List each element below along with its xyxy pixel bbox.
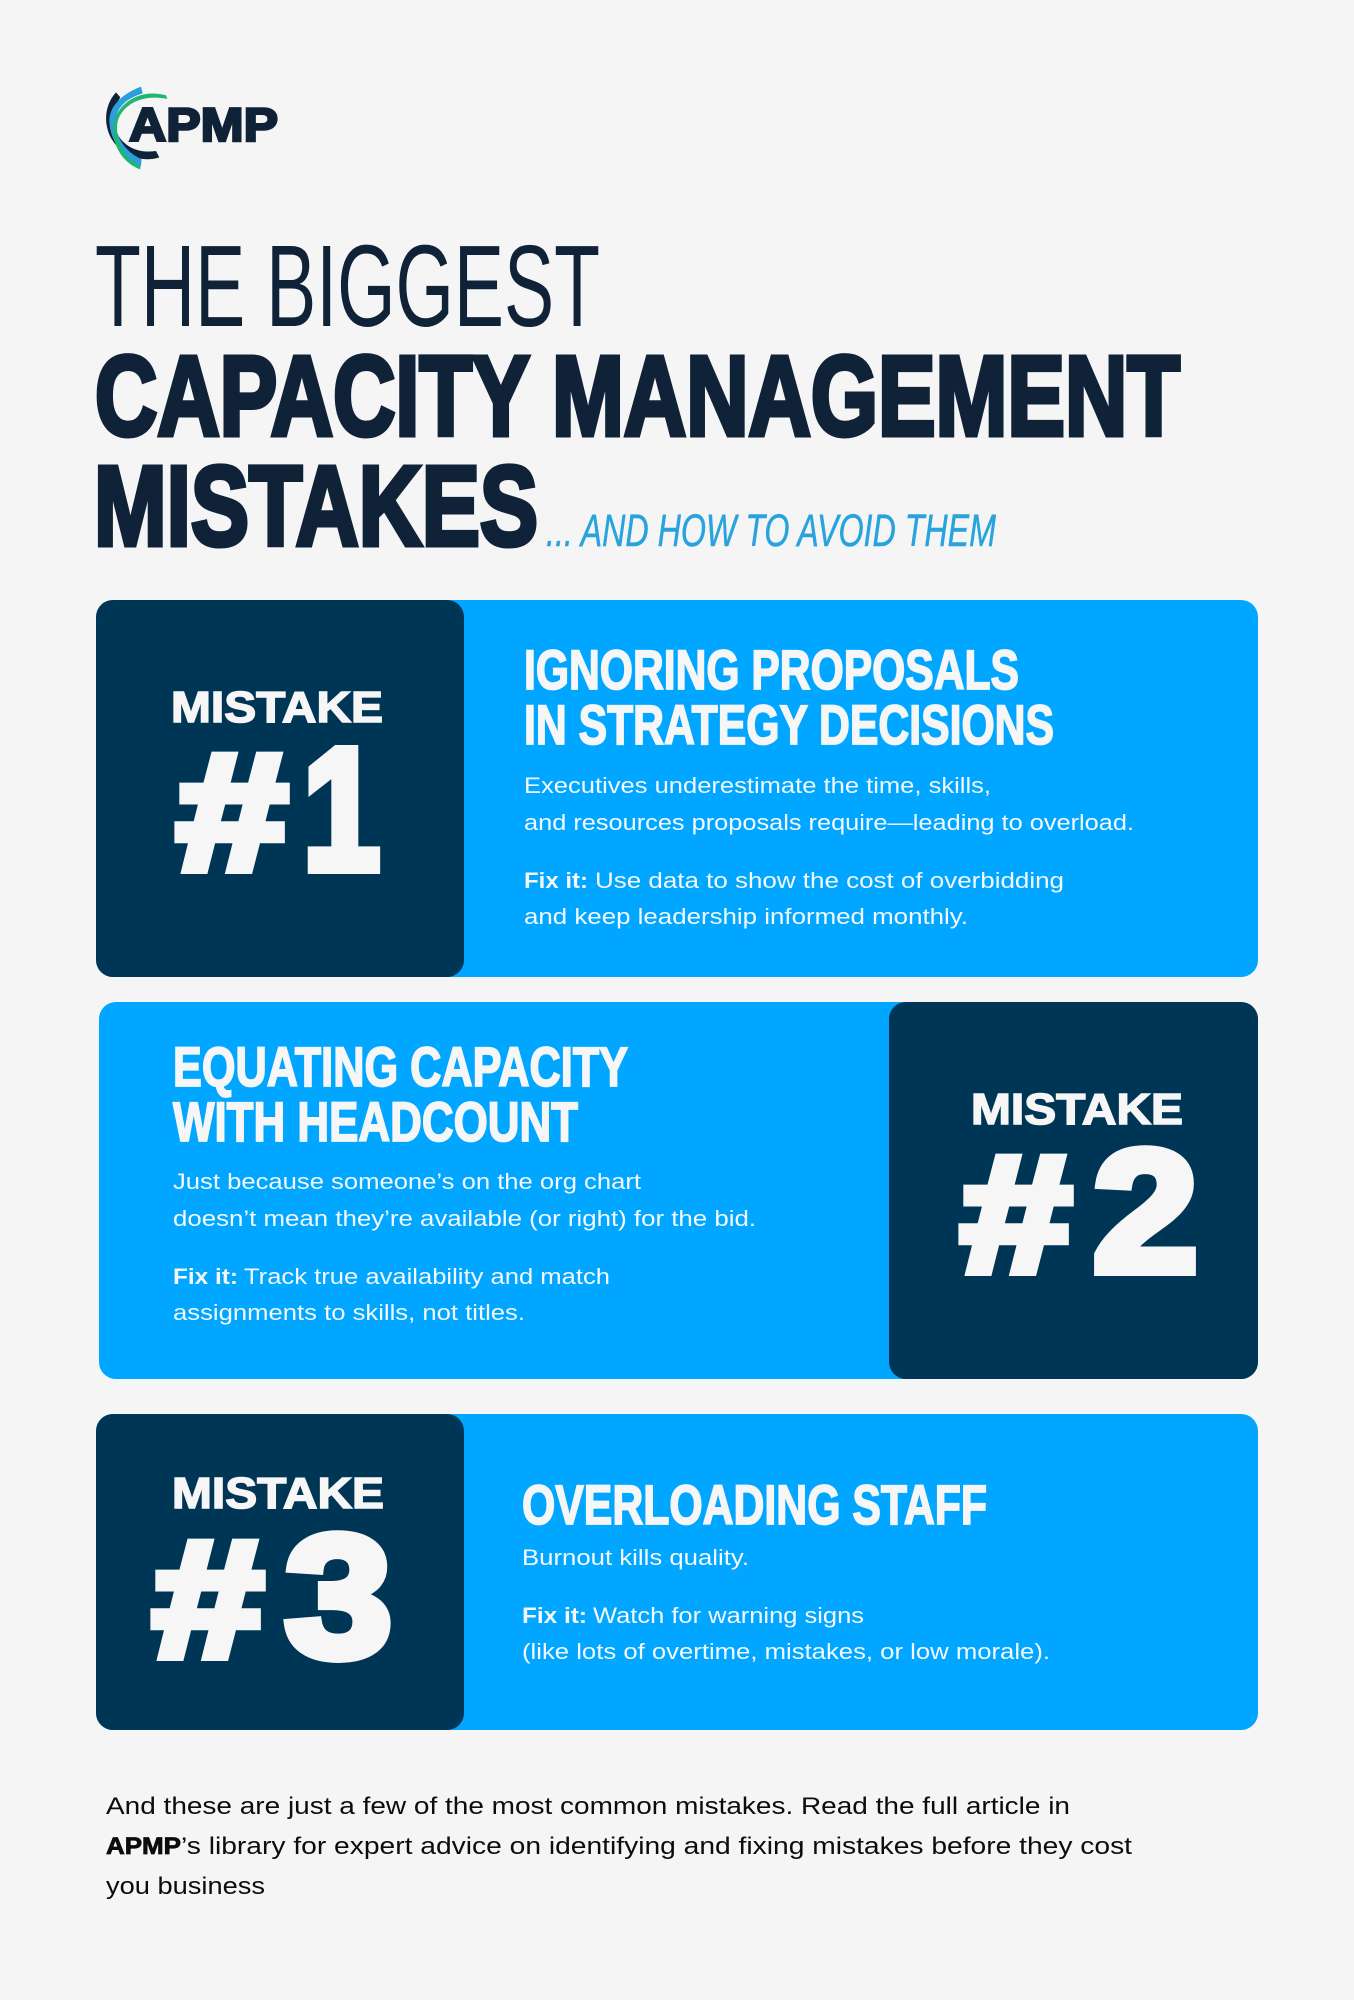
body text: and resources proposals require—leading to overload. — [524, 810, 1134, 835]
panel: mistake 3 — [96, 1414, 1258, 1730]
fix it text — [173, 1264, 610, 1325]
body text: Just because someone’s on the org chart — [173, 1169, 641, 1194]
title line 1: THE BIGGEST — [95, 221, 600, 351]
body text: Executives underestimate the time, skills, — [524, 773, 991, 798]
badge label: MISTAKE — [172, 1469, 384, 1518]
fix it text: Watch for warning signs — [593, 1603, 864, 1628]
fix it text: assignments to skills, not titles. — [173, 1300, 525, 1325]
heading — [173, 1035, 628, 1153]
body text — [524, 773, 1134, 835]
badge hash: # — [961, 1122, 1071, 1306]
heading: IGNORING PROPOSALS — [524, 638, 1019, 701]
card background — [99, 1002, 1258, 1379]
badge panel — [96, 1414, 464, 1730]
footer text: APMP — [106, 1833, 181, 1860]
footer text: you business — [106, 1873, 265, 1900]
badge number: 1 — [303, 712, 380, 906]
panel: mistake 2 — [99, 1002, 1258, 1379]
card background — [96, 600, 1258, 977]
fix it text: Fix it: — [524, 868, 588, 893]
heading: OVERLOADING STAFF — [522, 1473, 987, 1536]
card background — [96, 1414, 1258, 1730]
title — [94, 221, 1180, 569]
badge panel — [889, 1002, 1258, 1379]
badge hash: # — [177, 720, 287, 904]
panel: mistake 1 — [96, 600, 1258, 977]
fix it text: and keep leadership informed monthly. — [524, 904, 968, 929]
body text — [173, 1169, 756, 1231]
badge number: 3 — [285, 1499, 392, 1693]
heading: EQUATING CAPACITY — [173, 1035, 628, 1098]
fix it text: Fix it: — [173, 1264, 238, 1289]
badge label: MISTAKE — [171, 683, 383, 732]
heading — [524, 638, 1054, 756]
badge label: MISTAKE — [971, 1085, 1183, 1134]
footer text: And these are just a few of the most common mistakes. Read the full article in — [106, 1793, 1070, 1820]
badge hash: # — [153, 1507, 263, 1691]
icon: logo swooshes — [106, 87, 167, 169]
fix it text — [522, 1603, 1050, 1664]
logo: APMP — [106, 87, 278, 169]
footer text — [106, 1793, 1132, 1900]
footer text: ’s library for expert advice on identifying and fixing mistakes before they cost — [181, 1833, 1132, 1860]
heading: IN STRATEGY DECISIONS — [524, 693, 1054, 756]
fix it text: Fix it: — [522, 1603, 587, 1628]
body text: Burnout kills quality. — [522, 1545, 749, 1570]
fix it text — [524, 868, 1064, 929]
logo wordmark: APMP — [129, 98, 278, 151]
fix it text: (like lots of overtime, mistakes, or low morale). — [522, 1639, 1050, 1664]
fix it text: Use data to show the cost of overbidding — [595, 868, 1064, 893]
badge number: 2 — [1093, 1114, 1198, 1308]
subtitle: ... AND HOW TO AVOID THEM — [546, 505, 996, 556]
heading: WITH HEADCOUNT — [173, 1090, 578, 1153]
title line 3: MISTAKES — [94, 443, 538, 569]
fix it text: Track true availability and match — [244, 1264, 610, 1289]
badge panel — [96, 600, 464, 977]
body text: doesn’t mean they’re available (or right) for the bid. — [173, 1206, 756, 1231]
